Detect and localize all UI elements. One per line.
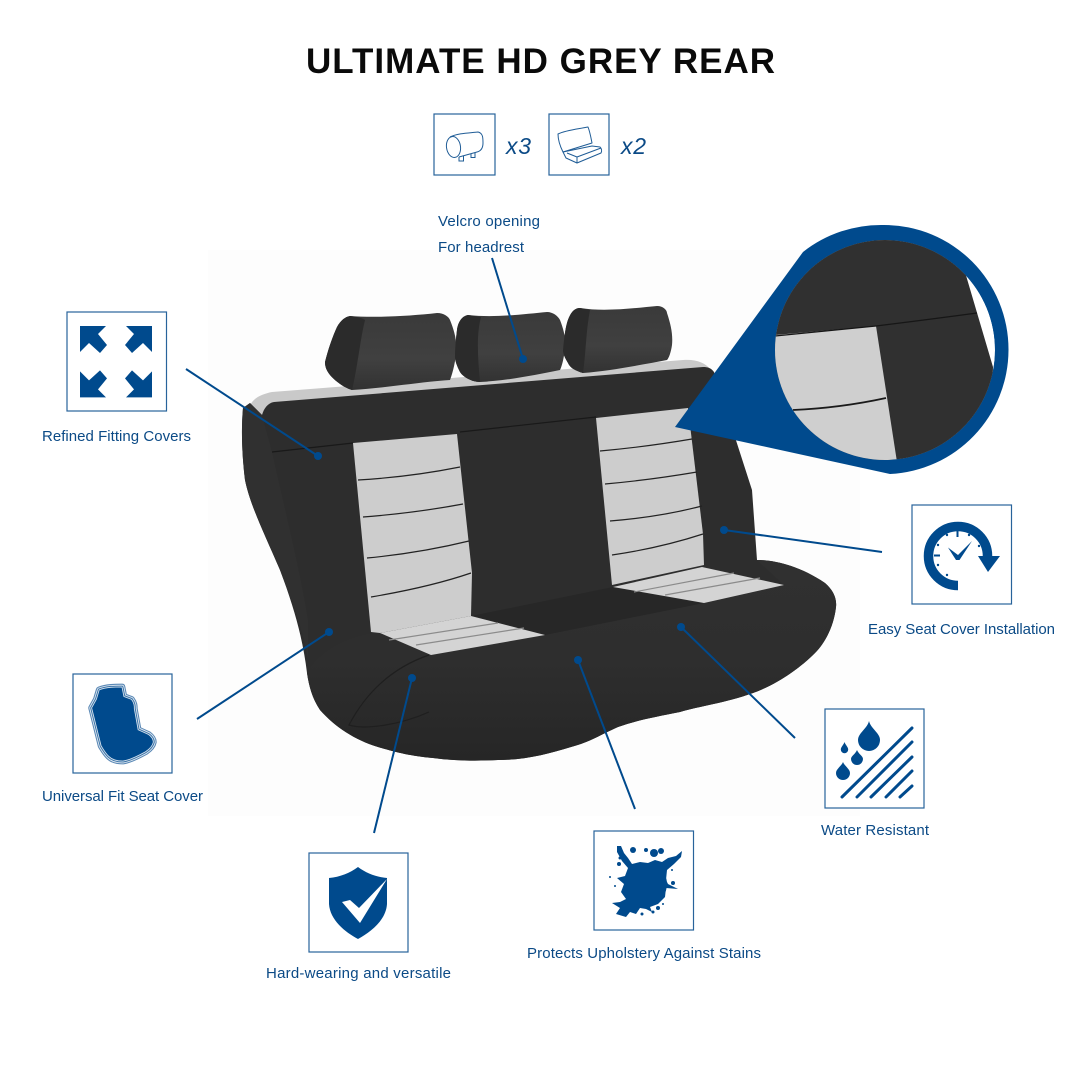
quantity: x3: x3 <box>505 133 531 159</box>
quantity: x2: x2 <box>620 133 646 159</box>
headrest right <box>563 306 672 373</box>
label: velcro opening: Velcro opening <box>438 213 540 230</box>
label: easy seat cover installation: Easy Seat Cover Installation <box>868 621 1055 638</box>
left back panel <box>353 434 472 633</box>
right back panel <box>596 408 704 585</box>
seat back dark body and base <box>242 367 836 761</box>
callout pointer and ring <box>675 225 1009 474</box>
leader: stain protection <box>574 656 635 809</box>
magnified fabric <box>775 240 995 460</box>
icon: water resistant <box>825 709 924 808</box>
label: velcro opening: For headrest <box>438 239 525 256</box>
headrest left <box>325 313 456 390</box>
seat base front <box>307 560 836 761</box>
rear seat cover product <box>242 306 836 761</box>
label: refined fitting covers: Refined Fitting Covers <box>42 428 191 445</box>
icon: seat quantity <box>549 114 609 175</box>
leader: velcro opening <box>492 258 527 363</box>
icon: refined fitting covers <box>67 312 166 411</box>
headrest side shading <box>325 308 590 390</box>
label: hard-wearing and versatile: Hard-wearing and versatile <box>266 965 451 982</box>
label: water resistant: Water Resistant <box>821 822 930 839</box>
seat back light top edge <box>249 360 711 425</box>
leader: universal fit <box>197 628 333 719</box>
label: universal fit seat cover: Universal Fit Seat Cover <box>42 788 203 805</box>
label: protects upholstery against stains: Protects Upholstery Against Stains <box>527 945 761 962</box>
title: ULTIMATE HD GREY REAR <box>306 42 775 81</box>
leader: easy installation <box>720 526 882 552</box>
headrest centre <box>455 312 565 382</box>
leader: hard-wearing <box>374 674 416 833</box>
left seat panel <box>380 616 545 655</box>
leader: water resistant <box>677 623 795 738</box>
seat back side shading <box>242 403 308 660</box>
right seat panel <box>613 567 784 603</box>
icon: easy seat cover installation <box>912 505 1012 604</box>
icon: headrest quantity <box>434 114 495 175</box>
label: velcro opening <box>438 213 540 256</box>
icon: shield with check <box>309 853 408 952</box>
icon: universal fit seat cover <box>73 674 172 773</box>
panel seams <box>272 417 760 727</box>
leader: refined fitting <box>186 369 322 460</box>
seat base centre panel <box>471 587 704 635</box>
icon: stain splatter <box>594 831 694 930</box>
callout: fabric magnifier <box>675 225 1009 474</box>
